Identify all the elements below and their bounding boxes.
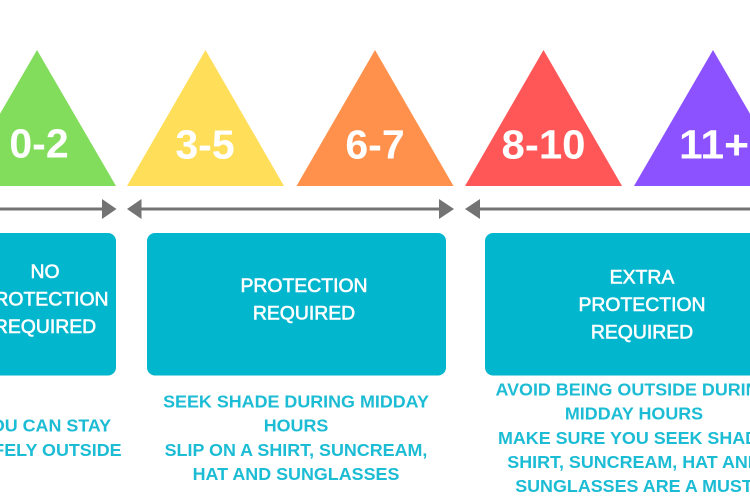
triangle: UV 0-2 green: 0-2 (9, 120, 69, 166)
arrow: range 0-2 (0, 199, 116, 219)
text: advice for UV 0-2 (0, 416, 122, 460)
text: advice for UV 3-7 (163, 392, 429, 484)
panel: protection required: REQUIRED (253, 302, 355, 324)
text: advice for UV 3-7: SLIP ON A SHIRT, SUNCREAM, (165, 440, 427, 460)
text: advice for UV 8+ (496, 380, 750, 496)
text: advice for UV 8+: MIDDAY HOURS (565, 404, 703, 424)
triangle: UV 11+ purple: 11+ (679, 122, 749, 168)
panel: extra protection required: PROTECTION (578, 294, 706, 316)
triangle: UV 3-5 yellow: 3-5 (175, 122, 235, 168)
triangle: UV 6-7 orange: 6-7 (345, 122, 405, 168)
triangle: UV 6-7 orange (296, 50, 454, 186)
text: advice for UV 3-7: SEEK SHADE DURING MIDDAY (163, 392, 429, 412)
panel: protection required (147, 233, 446, 376)
panel: extra protection required: REQUIRED (591, 322, 693, 344)
panel: no protection required (0, 233, 116, 376)
text: advice for UV 3-7: HOURS (264, 416, 328, 436)
panel: extra protection required (485, 233, 750, 376)
panel: no protection required: NO (30, 261, 60, 283)
triangle: UV 8-10 red: 8-10 (502, 122, 586, 168)
triangle: UV 3-5 yellow (127, 50, 284, 186)
text: advice for UV 3-7: HAT AND SUNGLASSES (193, 464, 399, 484)
arrow: range 8+ (465, 199, 750, 219)
panel: protection required: PROTECTION (240, 275, 368, 297)
triangle: UV 0-2 green (0, 50, 116, 186)
triangle: UV 11+ purple (634, 50, 750, 186)
text: advice for UV 8+: SUNGLASSES ARE A MUST (515, 476, 750, 496)
triangle: UV 8-10 red (465, 50, 622, 186)
panel: extra protection required: EXTRA (610, 266, 674, 288)
arrow: range 3-7 (127, 199, 454, 219)
